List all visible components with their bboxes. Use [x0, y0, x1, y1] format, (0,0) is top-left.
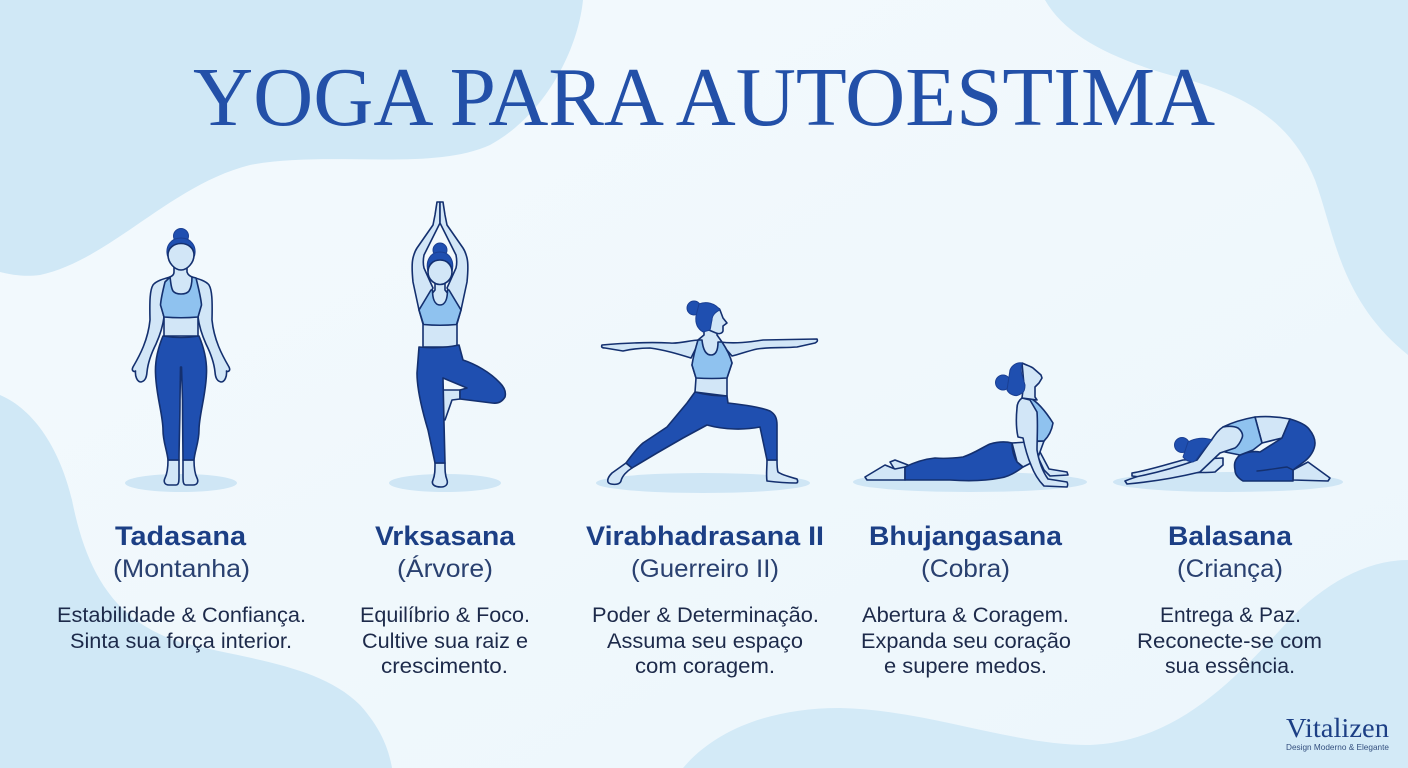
description: Virabhadrasana II: Assuma seu espaço [607, 630, 803, 653]
description: Bhujangasana: Abertura & Coragem. [862, 604, 1069, 627]
description: Tadasana: Estabilidade & Confiança. [57, 604, 306, 627]
logo: Vitalizen: Design Moderno & Elegante [1286, 742, 1389, 752]
description: Bhujangasana: e supere medos. [884, 655, 1047, 678]
pose translation: Guerreiro II: (Guerreiro II) [631, 555, 779, 583]
description: Balasana: sua essência. [1165, 655, 1295, 678]
pose name: Virabhadrasana II: Virabhadrasana II [586, 521, 824, 551]
figure: Tadasana [125, 228, 237, 492]
figure: Balasana [1113, 417, 1343, 492]
description: Vrksasana: crescimento. [381, 655, 508, 678]
figure: Virabhadrasana II [596, 301, 817, 493]
description: Balasana [1137, 604, 1322, 678]
description: Virabhadrasana II: com coragem. [635, 655, 775, 678]
description: Bhujangasana: Expanda seu coração [861, 630, 1071, 653]
pose translation: Montanha: (Montanha) [113, 555, 250, 583]
pose translation: Cobra: (Cobra) [921, 555, 1010, 583]
pose name: Balasana: Balasana [1168, 521, 1293, 551]
description: Vrksasana: Equilíbrio & Foco. [360, 604, 530, 627]
description: Tadasana [57, 604, 306, 653]
description: Virabhadrasana II: Poder & Determinação. [592, 604, 819, 627]
pose translation: Criança: (Criança) [1177, 555, 1283, 583]
pose name: Tadasana: Tadasana [115, 521, 247, 551]
figure: Bhujangasana [853, 363, 1087, 492]
pose name: Bhujangasana: Bhujangasana [869, 521, 1063, 551]
description: Bhujangasana [861, 604, 1071, 678]
title: YOGA PARA AUTOESTIMA [193, 51, 1215, 144]
description: Balasana: Entrega & Paz. [1160, 604, 1301, 627]
pose name: Vrksasana: Vrksasana [375, 521, 516, 551]
description: Vrksasana [360, 604, 530, 678]
figure: Vrksasana [389, 202, 505, 492]
description: Tadasana: Sinta sua força interior. [70, 630, 292, 653]
logo: Vitalizen: Vitalizen [1286, 713, 1390, 743]
description: Vrksasana: Cultive sua raiz e [362, 630, 528, 653]
description: Virabhadrasana II [592, 604, 819, 678]
pose translation: Árvore: (Árvore) [397, 554, 493, 583]
description: Balasana: Reconecte-se com [1137, 630, 1322, 653]
